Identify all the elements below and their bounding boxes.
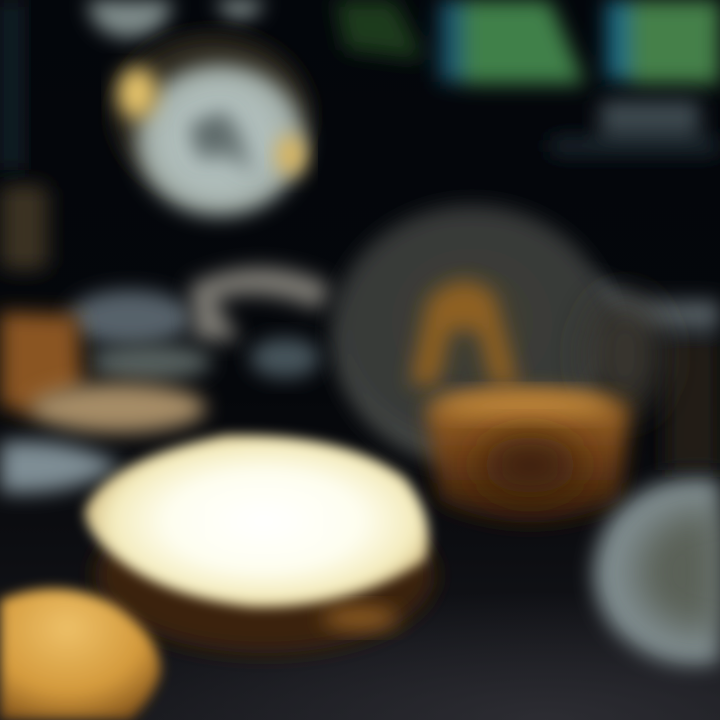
beige coin — [30, 383, 206, 433]
top-left vertical streak — [0, 0, 22, 170]
green panel right — [630, 0, 720, 84]
grey coin middle — [88, 344, 212, 380]
grey coin back — [68, 290, 192, 346]
clock centre shadow — [190, 112, 255, 175]
bottom-left gold coin — [0, 589, 160, 720]
clock gold glint left — [117, 67, 157, 119]
blue edge right — [606, 0, 632, 80]
bright coin — [85, 435, 435, 653]
top-right panels — [335, 0, 720, 84]
small pale coin — [250, 338, 320, 378]
clock — [114, 33, 310, 216]
top objects above clock — [88, 0, 264, 38]
stand at far left — [0, 185, 48, 270]
clock gold glint right — [276, 134, 306, 176]
glass right lobe — [587, 295, 663, 415]
right pale coin — [594, 478, 720, 665]
clock rim — [114, 33, 310, 197]
orange stack — [0, 312, 82, 415]
stack highlight — [435, 392, 615, 418]
right edge mid streak — [585, 275, 720, 470]
bright coin face — [85, 435, 429, 607]
blurred caption — [550, 100, 720, 154]
pale grey coin — [0, 441, 122, 493]
glass disc — [332, 205, 612, 465]
stack dark centre — [482, 437, 578, 493]
beige coin back — [190, 268, 330, 340]
green panel — [464, 0, 585, 84]
gold symbol — [410, 281, 518, 385]
table glow — [140, 560, 720, 720]
clock face — [136, 64, 304, 216]
rim glint — [322, 606, 398, 630]
blue edge — [440, 0, 466, 82]
left coin stacks — [0, 185, 330, 493]
glass coin — [332, 205, 663, 522]
gold stack — [425, 390, 630, 522]
dark green panel — [335, 0, 425, 60]
bright coin rim — [95, 497, 435, 653]
